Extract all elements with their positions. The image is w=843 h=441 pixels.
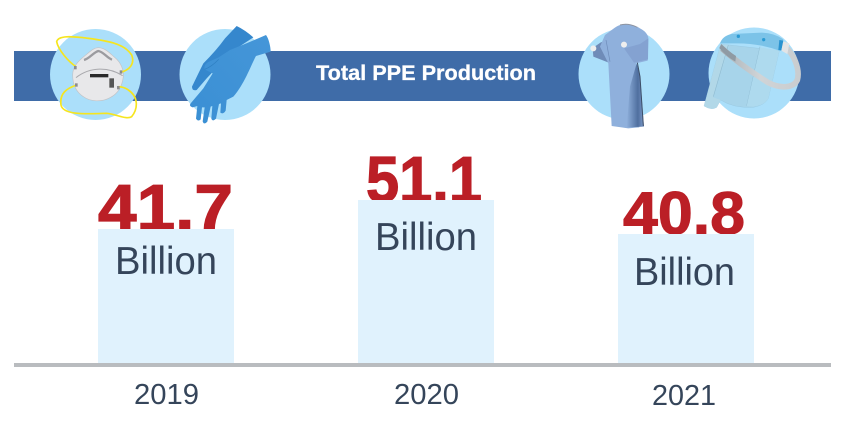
year label: 2021: 2021: [652, 380, 716, 412]
year label: 2020: 2020: [394, 379, 459, 411]
icon: medical gown: [578, 24, 670, 128]
icon: face shield: [704, 28, 800, 118]
header band: [14, 51, 831, 101]
value: 51.1: 51.1: [366, 143, 482, 216]
year label: 2019: 2019: [134, 379, 199, 411]
icon: blue gloves: [180, 26, 271, 123]
title: Total PPE Production: [316, 62, 536, 85]
value: 40.8: 40.8: [623, 180, 745, 247]
axis line: [14, 363, 831, 367]
column: 2021: [618, 180, 754, 363]
icon: respirator mask: [50, 29, 141, 120]
value: 41.7: 41.7: [98, 171, 233, 244]
unit: Billion: Billion: [634, 251, 735, 294]
column: 2019: [98, 171, 234, 363]
column: 2020: [358, 143, 494, 363]
unit: Billion: Billion: [375, 216, 477, 259]
unit: Billion: Billion: [115, 240, 217, 283]
